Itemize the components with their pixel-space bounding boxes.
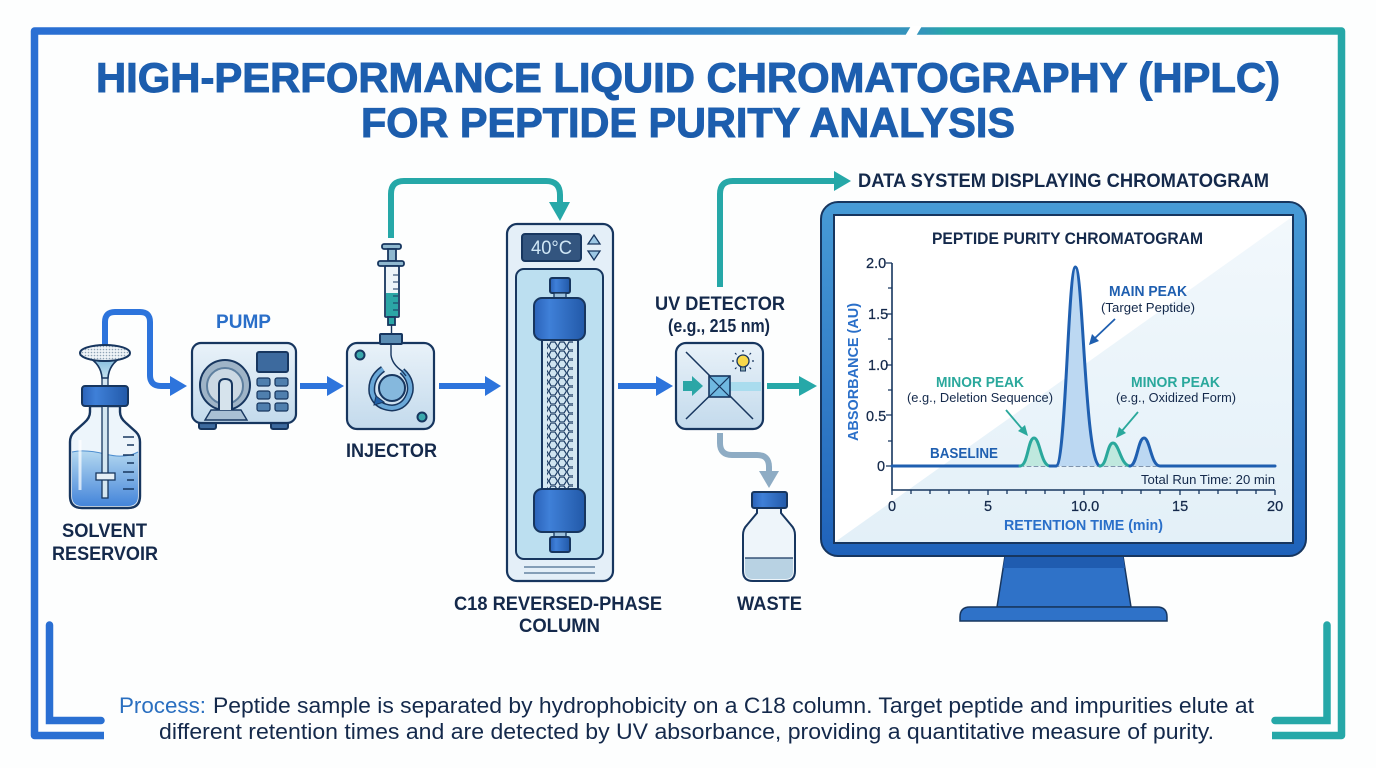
callout: minor peak right [1116, 374, 1236, 438]
x axis title: RETENTION TIME (min) [1004, 517, 1163, 534]
label: UV detector: (e.g., 215 nm) [668, 316, 770, 336]
icon: pump [192, 343, 296, 429]
chart: axes: 20 [1267, 499, 1283, 515]
label: pump: PUMP [216, 312, 271, 333]
title [96, 54, 1280, 146]
chart: axes: 15 [1172, 499, 1188, 515]
title: FOR PEPTIDE PURITY ANALYSIS [361, 99, 1015, 146]
label: data system: DATA SYSTEM DISPLAYING CHROMATOGRAM [858, 171, 1269, 192]
callout: minor peak left: MINOR PEAK [936, 374, 1024, 391]
icon: C18 column in oven [507, 224, 613, 581]
chart: axes: 0.5 [866, 409, 886, 425]
y axis title: ABSORBANCE (AU) [845, 303, 862, 441]
arrow: injector to column [439, 376, 501, 396]
label: UV detector: UV DETECTOR [655, 294, 785, 315]
chart: axes: 10.0 [1071, 499, 1099, 515]
arrow: pump to injector [300, 376, 344, 396]
arrow: detector to waste [720, 433, 779, 488]
chart: peaks [892, 267, 1275, 466]
chart: axes: 1.5 [868, 307, 888, 323]
chart: axes: 0 [877, 459, 885, 475]
label: solvent reservoir [52, 521, 158, 565]
process description: Process: [119, 693, 206, 718]
chart: axes: 0 [888, 499, 896, 515]
label: C18 column [454, 594, 662, 637]
label: injector: INJECTOR [346, 441, 437, 462]
callout: minor peak left [907, 374, 1053, 436]
label: total run time: Total Run Time: 20 min [1141, 472, 1275, 487]
chart: axes: 2.0 [866, 256, 886, 272]
label: C18 column: C18 REVERSED-PHASE [454, 594, 662, 615]
label: waste: WASTE [737, 594, 802, 615]
icon: injector [347, 334, 434, 429]
title: HIGH-PERFORMANCE LIQUID CHROMATOGRAPHY (HPLC) [96, 54, 1280, 101]
chart: axes: 1.0 [868, 358, 888, 374]
arrow: detector to data system [720, 171, 851, 287]
icon: UV detector [676, 343, 763, 429]
callout: minor peak right: MINOR PEAK [1131, 374, 1220, 391]
chart title: PEPTIDE PURITY CHROMATOGRAM [932, 229, 1203, 248]
callout: main peak: MAIN PEAK [1109, 283, 1187, 300]
callout: main peak: (Target Peptide) [1101, 300, 1195, 315]
callout: minor peak left: (e.g., Deletion Sequence) [907, 390, 1053, 405]
arrow: reservoir to pump [105, 312, 187, 396]
callout: minor peak right: (e.g., Oxidized Form) [1116, 390, 1236, 405]
label: UV detector [655, 294, 785, 336]
icon: C18 column in oven: 40°C [531, 238, 572, 259]
icon: monitor stand [960, 556, 1167, 621]
arrow: column to detector [618, 376, 673, 396]
arrow: detector to data output [767, 376, 817, 396]
process description: different retention times and are detected by UV absorbance, providing a quantitative measure of purity. [159, 719, 1214, 744]
label: solvent reservoir: SOLVENT [62, 521, 147, 542]
panel: monitor [821, 202, 1306, 556]
label: C18 column: COLUMN [519, 616, 600, 637]
process description [119, 693, 1254, 744]
icon: waste bottle [743, 492, 795, 581]
arrow: injector loop to column [391, 181, 570, 238]
chart: axes [866, 256, 1283, 515]
icon: solvent reservoir bottle [70, 345, 140, 508]
process description: Peptide sample is separated by hydrophobicity on a C18 column. Target peptide and impurities elute at [213, 693, 1254, 718]
icon: syringe [378, 244, 404, 334]
callout: main peak [1089, 283, 1195, 345]
chart: axes: 5 [984, 499, 992, 515]
label: solvent reservoir: RESERVOIR [52, 544, 158, 565]
label: baseline: BASELINE [930, 445, 998, 462]
